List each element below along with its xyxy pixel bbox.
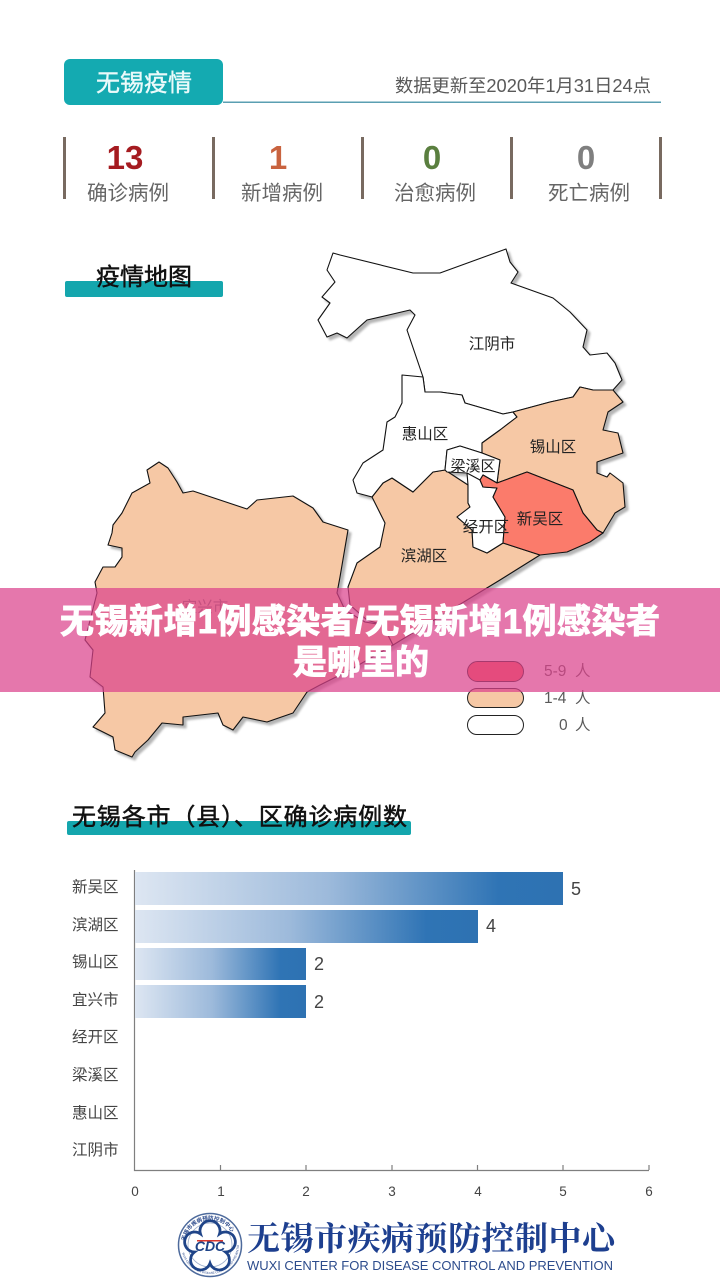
region: Yixing [85,462,393,757]
logo: organisation name: 无锡市疾病预防控制中心 [247,1221,619,1258]
region: Jiangyin [318,249,622,414]
x axis labels: 3 [388,1184,396,1199]
stat: deaths [548,139,630,205]
x axis labels: 2 [302,1184,310,1199]
stat: cured: 治愈病例 [394,182,476,205]
map labels: 惠山区 [402,425,448,443]
overlay banner title: 无锡新增1例感染者/无锡新增1例感染者 [60,603,660,641]
stat: deaths: 0 [577,139,595,176]
value labels: 4 [486,916,496,936]
overlay banner title [0,588,720,692]
region: Binhu [348,470,540,645]
bars [135,872,563,1018]
stat: new: 新增病例 [241,182,323,205]
map labels: 江阴市 [469,335,515,353]
region: Huishan [353,375,517,497]
value labels: 5 [571,879,581,899]
category labels: 宜兴市 [72,991,119,1009]
legend [468,662,591,734]
category labels: 新吴区 [72,878,119,896]
stat: cured: 0 [423,139,441,176]
stat: new: 1 [269,139,287,176]
map labels: 梁溪区 [450,458,496,475]
x axis labels [131,1184,653,1199]
category labels: 梁溪区 [72,1066,119,1084]
category labels [72,878,119,1159]
x axis labels: 1 [217,1184,225,1199]
map labels: 滨湖区 [401,547,447,565]
map labels: 锡山区 [530,438,576,456]
category labels: 江阴市 [72,1141,119,1159]
title tab: 无锡疫情 [96,70,192,97]
value labels: 2 [314,992,324,1012]
region: Xinwu [480,472,603,555]
category labels: 经开区 [72,1028,119,1046]
stat: confirmed [87,139,169,205]
stat: new [241,139,323,205]
stat: cured [394,139,476,205]
logo: organisation name: WUXI CENTER FOR DISEASE CONTROL AND PREVENTION [247,1258,613,1273]
value labels: 2 [314,954,324,974]
map heading: 疫情地图 [96,264,192,291]
header [64,59,661,105]
map labels: 宜兴市 [182,598,228,616]
stat: deaths: 死亡病例 [548,182,630,205]
stats row [63,137,662,205]
map labels: 新吴区 [517,510,563,528]
logo: Wuxi CDC emblem [178,1212,242,1278]
logo: Wuxi CDC emblem: 无锡市疾病预防控制中心 [181,1215,234,1240]
overlay banner title: 是哪里的 [293,644,429,682]
region: Xishan [482,387,625,533]
map of Wuxi [85,249,625,757]
x axis labels: 6 [645,1184,653,1199]
map labels [182,335,576,616]
legend: 人 [575,689,591,707]
chart heading: 无锡各市（县）、区确诊病例数 [72,804,407,831]
logo: Wuxi CDC emblem: WUXI CENTER FOR DISEASE CONTROL AND PREVENTION [182,1245,239,1274]
bar chart [72,870,653,1199]
category labels: 滨湖区 [72,916,119,934]
legend: 5-9 [544,663,566,680]
legend: 人 [575,662,591,680]
value labels [314,879,581,1012]
map labels: 经开区 [463,518,509,536]
stat: confirmed: 确诊病例 [87,182,169,205]
legend: 1-4 [544,690,567,707]
x axis labels: 5 [559,1184,567,1199]
region: Liangxi and Jingkai [445,446,505,553]
category labels: 锡山区 [72,953,119,971]
category labels: 惠山区 [72,1104,119,1122]
x axis labels: 4 [474,1184,482,1199]
title tab [64,59,223,105]
map heading [65,264,223,297]
stat: confirmed: 13 [107,139,143,176]
logo: organisation name [247,1221,619,1273]
legend: 人 [575,716,591,734]
x axis labels: 0 [131,1184,139,1199]
update date: 数据更新至2020年1月31日24点 [395,76,651,96]
chart axes [134,870,649,1170]
legend: 0 [559,717,568,734]
logo: Wuxi CDC emblem: CDC [195,1238,226,1254]
